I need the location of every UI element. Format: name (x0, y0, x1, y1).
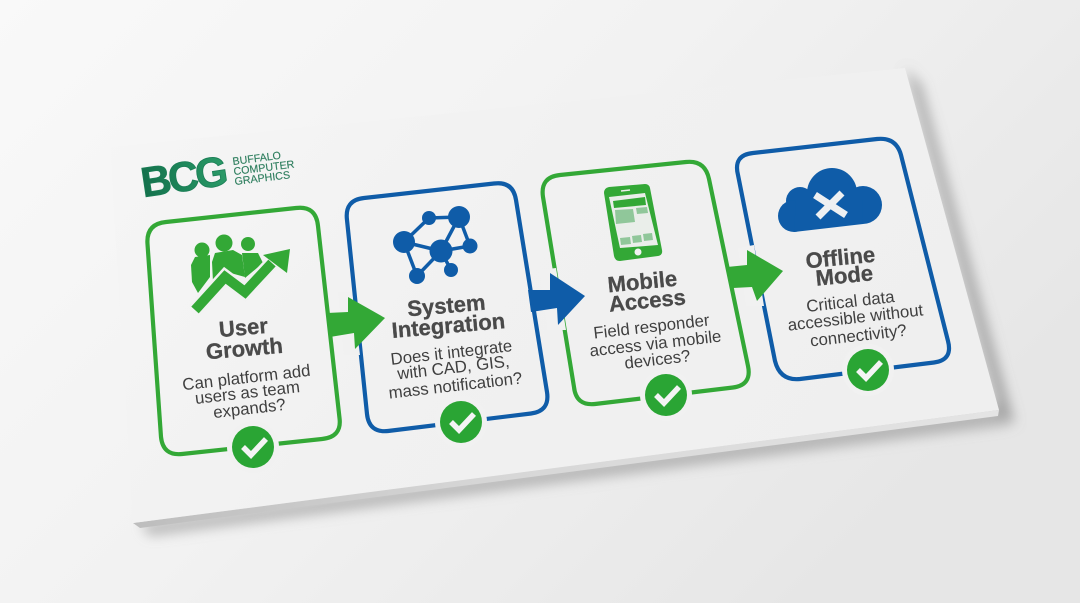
description: devices? (623, 346, 691, 373)
panel: slab shadow (140, 68, 1016, 536)
check badge (227, 421, 279, 473)
logo wordmark (232, 150, 295, 188)
description: mass notification? (388, 368, 523, 403)
panel: system integration (347, 183, 547, 448)
description: Does it integrate (390, 336, 513, 369)
heading: Mobile (606, 266, 678, 297)
heading: System (406, 290, 486, 321)
card outline (347, 183, 547, 431)
panel: user growth (147, 208, 340, 473)
description: Critical data (805, 287, 896, 316)
heading (205, 313, 284, 364)
panel: mobile access (543, 162, 749, 421)
description (787, 287, 924, 350)
panel: slab side (133, 410, 999, 528)
description: Field responder (592, 310, 711, 343)
logo wordmark: BUFFALO (232, 150, 282, 168)
description: with CAD, GIS, (395, 352, 511, 383)
logo mark: BCG (138, 147, 229, 206)
card outline (147, 208, 340, 454)
description: access via mobile (589, 327, 722, 360)
heading: Mode (814, 260, 874, 291)
panel: offline mode (737, 139, 949, 396)
description: users as team (194, 377, 301, 408)
heading: Growth (205, 333, 284, 364)
logo wordmark: GRAPHICS (234, 169, 291, 188)
description (589, 310, 722, 373)
heading: Integration (391, 308, 506, 343)
logo wordmark: COMPUTER (233, 159, 295, 178)
logo (138, 147, 295, 206)
check badge (435, 396, 487, 448)
description: accessible without (787, 300, 924, 335)
check badge (640, 369, 692, 421)
description: expands? (212, 395, 287, 422)
heading (606, 266, 687, 317)
heading: Access (608, 284, 687, 317)
icon: network (393, 206, 478, 284)
icon: cloud with X (778, 168, 882, 232)
card outline (737, 139, 949, 379)
icon: phone (604, 184, 662, 261)
description: connectivity? (809, 321, 908, 350)
arrow: integration to mobile (528, 268, 585, 330)
heading: User (218, 313, 269, 342)
panel: slab top (110, 68, 999, 523)
arrow: mobile to offline (727, 245, 783, 306)
description (388, 336, 523, 403)
check badge (842, 344, 894, 396)
heading: Offline (804, 242, 876, 273)
arrow: growth to integration (327, 292, 385, 355)
icon: users with growth arrow (191, 234, 290, 310)
heading (391, 290, 506, 343)
card outline (543, 162, 749, 404)
description: Can platform add (181, 361, 311, 394)
description (181, 361, 311, 422)
heading (804, 242, 876, 291)
